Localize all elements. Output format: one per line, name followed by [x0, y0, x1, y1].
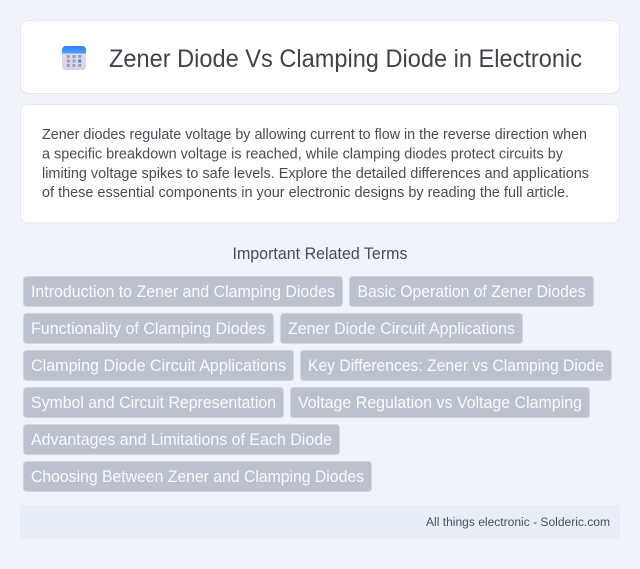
tag: Voltage Regulation vs Voltage Clamping: [298, 393, 582, 412]
tag: Choosing Between Zener and Clamping Diodes: [31, 467, 364, 486]
heading: important related terms: Important Related Terms: [232, 244, 408, 263]
tag: Functionality of Clamping Diodes: [31, 319, 266, 338]
tag: [24, 462, 372, 492]
intro paragraph: Zener diodes regulate voltage by allowing current to flow in the reverse direction when: [42, 127, 587, 143]
tag: [24, 350, 294, 380]
tag: Advantages and Limitations of Each Diode: [31, 430, 332, 449]
tag: [350, 276, 594, 306]
tag: [290, 388, 590, 418]
intro paragraph: limiting voltage spikes to safe levels. Explore the detailed differences and applications: [42, 166, 589, 182]
tag list: [24, 276, 612, 492]
tag: [24, 276, 342, 306]
tag: [24, 424, 340, 454]
tag: Symbol and Circuit Representation: [31, 393, 276, 412]
intro paragraph: a specific breakdown voltage is reached, while clamping diodes protect circuits by: [42, 146, 564, 162]
tag: Basic Operation of Zener Diodes: [358, 282, 586, 301]
tag: Zener Diode Circuit Applications: [288, 319, 515, 338]
footer credit: All things electronic - Solderic.com: [426, 515, 610, 529]
tag: Key Differences: Zener vs Clamping Diode: [308, 356, 604, 375]
tag: [300, 350, 612, 380]
intro paragraph: [42, 127, 589, 201]
panel: intro text: [20, 104, 620, 223]
header panel: [20, 20, 620, 94]
tag: Introduction to Zener and Clamping Diodes: [31, 282, 335, 301]
title: Zener Diode Vs Clamping Diode in Electronic: [109, 45, 582, 73]
tag: [24, 314, 274, 344]
icon: calendar: [62, 46, 86, 70]
tag: Clamping Diode Circuit Applications: [31, 356, 286, 375]
tag: [24, 388, 284, 418]
footer: [20, 505, 620, 539]
intro paragraph: of these essential components in your electronic designs by reading the full article.: [42, 185, 569, 201]
tag: [280, 314, 522, 344]
